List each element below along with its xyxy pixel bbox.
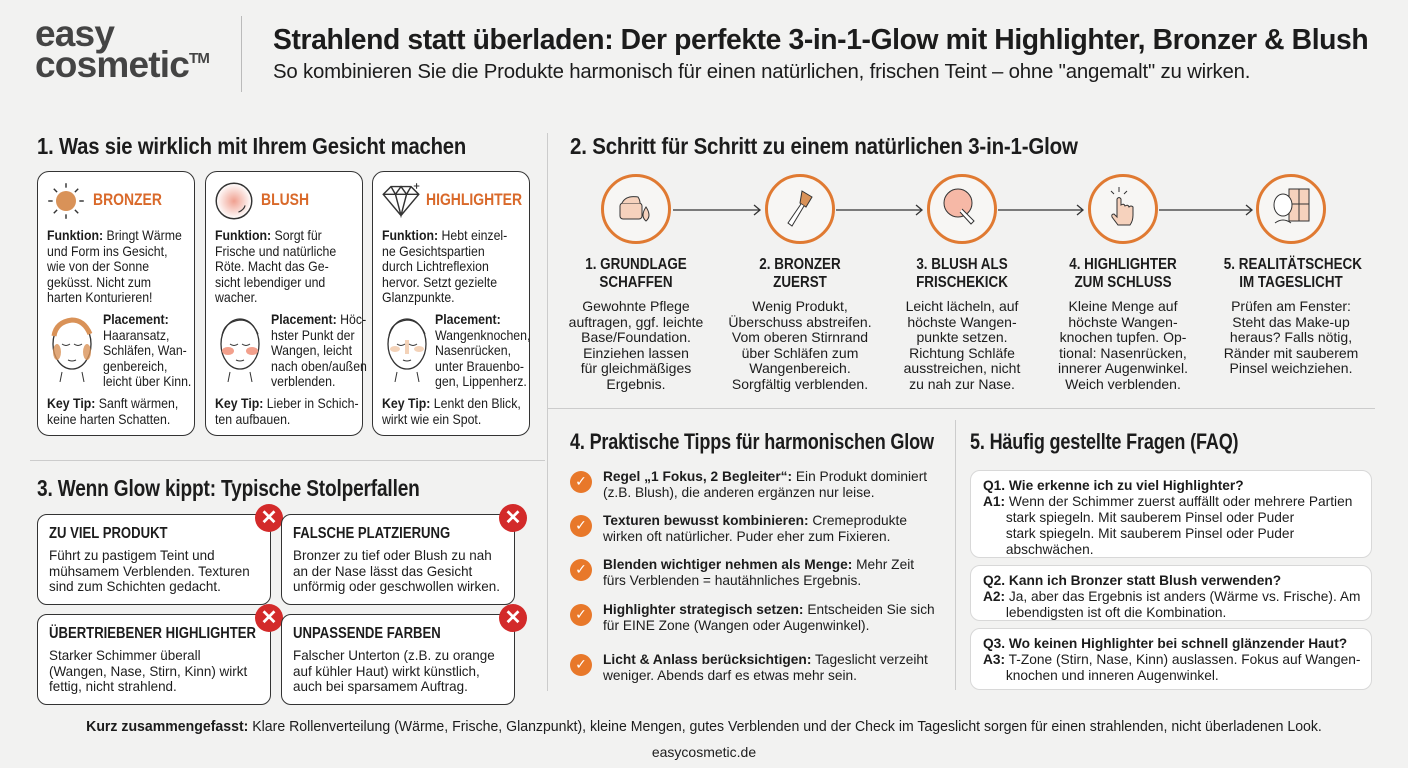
error card: zu viel produkt: Führt zu pastigem Teint und bbox=[49, 547, 215, 563]
step 5: Prüfen am Fenster: bbox=[1231, 298, 1351, 314]
tip 3: ✓ bbox=[575, 562, 587, 578]
icon: blush compact bbox=[216, 182, 252, 220]
tip 4 bbox=[570, 601, 935, 633]
card: bronzer: Funktion: Bringt Wärme bbox=[47, 227, 182, 243]
step 3: höchste Wangen- bbox=[907, 314, 1017, 330]
step 3: ausstreichen, nicht bbox=[904, 360, 1020, 376]
error card: highlighter: fettig, nicht strahlend. bbox=[49, 678, 177, 694]
faq 2: A2: Ja, aber das Ergebnis ist anders (Wärme vs. Frische). Am bbox=[983, 588, 1360, 604]
step 4: knochen tupfen. Op- bbox=[1060, 329, 1186, 345]
faq 1: abschwächen. bbox=[1006, 541, 1094, 557]
card: blush: nach oben/außen bbox=[271, 358, 367, 374]
tip 1 bbox=[570, 468, 927, 500]
step 4: höchste Wangen- bbox=[1068, 314, 1178, 330]
step 4: ZUM SCHLUSS bbox=[1074, 274, 1172, 291]
step 1: auftragen, ggf. leichte bbox=[569, 314, 703, 330]
icon: sun bbox=[48, 183, 84, 219]
card: bronzer: BRONZER bbox=[93, 190, 162, 209]
card: highlighter: Wangenknochen, bbox=[435, 326, 530, 342]
card: blush: Wangen, leicht bbox=[271, 342, 352, 358]
error card: farben: UNPASSENDE FARBEN bbox=[293, 625, 441, 642]
tip 5: ✓ bbox=[575, 657, 587, 673]
error card: falsche platzierung: ✕ bbox=[505, 507, 521, 529]
logo: cosmeticTM bbox=[35, 44, 209, 85]
error card: falsche platzierung: FALSCHE PLATZIERUNG bbox=[293, 525, 450, 542]
card: highlighter bbox=[372, 171, 530, 436]
card: bronzer: Haaransatz, bbox=[103, 326, 169, 342]
tip 1: Regel „1 Fokus, 2 Begleiter“: Ein Produkt dominiert bbox=[603, 468, 927, 484]
icon: diamond bbox=[382, 183, 420, 218]
faq 3: A3: T-Zone (Stirn, Nase, Kinn) auslassen. Fokus auf Wangen- bbox=[983, 651, 1360, 667]
step 2: Überschuss abstreifen. bbox=[728, 314, 872, 330]
error card: falsche platzierung: Bronzer zu tief oder Blush zu nah bbox=[293, 547, 492, 563]
card: blush: BLUSH bbox=[261, 190, 309, 209]
card: blush: Funktion: Sorgt für bbox=[215, 227, 322, 243]
card: bronzer: wie von der Sonne bbox=[47, 258, 149, 274]
icon: face bronzer bbox=[52, 318, 92, 382]
error card: falsche platzierung: an der Nase lässt das Gesicht bbox=[293, 562, 472, 578]
error card: zu viel produkt bbox=[37, 514, 271, 605]
error card: zu viel produkt: mühsamem Verblenden. Texturen bbox=[49, 562, 250, 578]
tip 2: Texturen bewusst kombinieren: Cremeprodukte bbox=[603, 512, 907, 528]
tip 1: (z.B. Blush), die anderen ergänzen nur leise. bbox=[603, 484, 875, 500]
step 5: IM TAGESLICHT bbox=[1239, 274, 1343, 291]
card: blush: Key Tip: Lieber in Schich- bbox=[215, 395, 359, 411]
card: blush: wacher. bbox=[215, 289, 257, 305]
step 5: Steht das Make-up bbox=[1232, 314, 1350, 330]
step 5: Pinsel weichziehen. bbox=[1230, 360, 1352, 376]
error card: highlighter bbox=[37, 614, 271, 705]
card: bronzer: geküsst. Nicht zum bbox=[47, 274, 151, 290]
error card: farben: auf kühler Haut) wirkt künstlich, bbox=[293, 662, 480, 678]
step 2 bbox=[728, 174, 872, 392]
step 5: heraus? Falls nötig, bbox=[1230, 329, 1352, 345]
logo bbox=[35, 13, 209, 85]
heading: section 4: 4. Praktische Tipps für harmonischen Glow bbox=[570, 429, 934, 454]
step 3: FRISCHEKICK bbox=[916, 274, 1008, 291]
step 5: 5. REALITÄTSCHECK bbox=[1224, 256, 1362, 273]
step 2: ZUERST bbox=[773, 274, 827, 291]
tip 3 bbox=[570, 556, 914, 588]
step 2: über Schläfen zum bbox=[742, 344, 858, 360]
card: highlighter: Glanzpunkte. bbox=[382, 289, 455, 305]
step 3: zu nah zur Nase. bbox=[909, 376, 1015, 392]
step 3: Richtung Schläfe bbox=[909, 344, 1015, 360]
card: blush: Frische und natürliche bbox=[215, 242, 336, 258]
error card: zu viel produkt: ZU VIEL PRODUKT bbox=[49, 525, 168, 542]
error card: highlighter: ÜBERTRIEBENER HIGHLIGHTER bbox=[49, 625, 256, 642]
tip 3: Blenden wichtiger nehmen als Menge: Mehr Zeit bbox=[603, 556, 914, 572]
tip 3: fürs Verblenden = hautähnliches Ergebnis. bbox=[603, 572, 861, 588]
card: blush bbox=[205, 171, 363, 436]
card: highlighter: Placement: bbox=[435, 311, 501, 327]
card: bronzer: Key Tip: Sanft wärmen, bbox=[47, 395, 178, 411]
step 5: Ränder mit sauberem bbox=[1224, 344, 1358, 360]
step 1: Gewohnte Pflege bbox=[582, 298, 690, 314]
tip 2: wirken oft natürlicher. Puder eher zum Fixieren. bbox=[603, 528, 890, 544]
step 1: SCHAFFEN bbox=[599, 274, 673, 291]
card: highlighter: Key Tip: Lenkt den Blick, bbox=[382, 395, 521, 411]
card: highlighter: wirkt wie ein Spot. bbox=[382, 410, 481, 426]
faq 3 bbox=[970, 628, 1372, 690]
step 1 bbox=[569, 174, 703, 392]
card: blush: Röte. Macht das Ge- bbox=[215, 258, 329, 274]
card: highlighter: gen, Lippenherz. bbox=[435, 373, 527, 389]
card: blush: verblenden. bbox=[271, 373, 335, 389]
card: bronzer: keine harten Schatten. bbox=[47, 410, 170, 426]
heading: section 3: 3. Wenn Glow kippt: Typische Stolperfallen bbox=[37, 475, 420, 501]
card: highlighter: Nasenrücken, bbox=[435, 342, 511, 358]
arrows between steps bbox=[673, 204, 1253, 216]
tip 2 bbox=[570, 512, 907, 544]
error card: zu viel produkt: ✕ bbox=[261, 507, 277, 529]
faq 3: Q3. Wo keinen Highlighter bei schnell glänzender Haut? bbox=[983, 635, 1347, 651]
error card: falsche platzierung bbox=[281, 514, 515, 605]
step 3: Leicht lächeln, auf bbox=[906, 298, 1018, 314]
step 2: Wangenbereich. bbox=[749, 360, 851, 376]
heading: section 5: 5. Häufig gestellte Fragen (FAQ) bbox=[970, 429, 1238, 454]
error card: farben: auch bei sparsamem Auftrag. bbox=[293, 678, 468, 694]
card: bronzer: genbereich, bbox=[103, 358, 167, 374]
step 4: innerer Augenwinkel. bbox=[1058, 360, 1188, 376]
step 2: Vom oberen Stirnrand bbox=[732, 329, 868, 345]
url: easycosmetic.de bbox=[652, 744, 756, 760]
card: blush: Placement: Höc- bbox=[271, 311, 366, 327]
faq 1: stark spiegeln. Mit sauberem Pinsel oder Puder bbox=[1006, 509, 1294, 525]
tip 4: für EINE Zone (Wangen oder Augenwinkel). bbox=[603, 617, 869, 633]
tip 1: ✓ bbox=[575, 474, 587, 490]
error card: farben bbox=[281, 614, 515, 705]
step 2: Wenig Produkt, bbox=[752, 298, 848, 314]
title: Strahlend statt überladen: Der perfekte 3-in-1-Glow mit Highlighter, Bronzer & Blush bbox=[273, 23, 1368, 55]
heading: section 2: 2. Schritt für Schritt zu einem natürlichen 3-in-1-Glow bbox=[570, 133, 1078, 159]
error card: farben: ✕ bbox=[505, 607, 521, 629]
tip 5: weniger. Abends darf es etwas mehr sein. bbox=[603, 667, 857, 683]
card: bronzer: harten Konturieren! bbox=[47, 289, 152, 305]
faq 1: stark spiegeln. Mit sauberem Pinsel oder Puder bbox=[1006, 525, 1294, 541]
step 3: punkte setzen. bbox=[916, 329, 1008, 345]
step 1: für gleichmäßiges bbox=[581, 360, 691, 376]
card: highlighter: ne Gesichtspartien bbox=[382, 242, 485, 258]
tip 4: Highlighter strategisch setzen: Entscheiden Sie sich bbox=[603, 601, 935, 617]
card: highlighter: hervor. Setzt gezielte bbox=[382, 274, 497, 290]
error card: falsche platzierung: unförmig oder geschwollen wirken. bbox=[293, 578, 500, 594]
faq 1: A1: Wenn der Schimmer zuerst auffällt oder mehrere Partien bbox=[983, 493, 1352, 509]
step 2: Sorgfältig verblenden. bbox=[732, 376, 868, 392]
card: highlighter: unter Brauenbo- bbox=[435, 358, 524, 374]
faq 2: lebendigsten ist oft die Kombination. bbox=[1006, 604, 1226, 620]
step 4: 4. HIGHLIGHTER bbox=[1069, 256, 1177, 273]
step 3: 3. BLUSH ALS bbox=[916, 256, 1008, 273]
tip 5 bbox=[570, 651, 928, 683]
error card: highlighter: ✕ bbox=[261, 607, 277, 629]
tip 5: Licht & Anlass berücksichtigen: Tageslicht verzeiht bbox=[603, 651, 928, 667]
card: bronzer: und Form ins Gesicht, bbox=[47, 242, 168, 258]
faq 3: knochen und inneren Augenwinkel. bbox=[1006, 667, 1219, 683]
step 4: Weich verblenden. bbox=[1065, 376, 1181, 392]
step 1: Einziehen lassen bbox=[583, 344, 689, 360]
card: blush: ten aufbauen. bbox=[215, 410, 290, 426]
step 5 bbox=[1224, 174, 1362, 376]
faq 1: Q1. Wie erkenne ich zu viel Highlighter? bbox=[983, 477, 1244, 493]
summary footer: Kurz zusammengefasst: Klare Rollenverteilung (Wärme, Frische, Glanzpunkt), kleine Mengen, gutes Verblenden und der Check im Tageslicht sorgen für einen strahlenden, nicht überladenen Look. bbox=[86, 718, 1322, 735]
heading: section 1: 1. Was sie wirklich mit Ihrem Gesicht machen bbox=[37, 133, 466, 159]
faq 1 bbox=[970, 470, 1372, 558]
faq 2: Q2. Kann ich Bronzer statt Blush verwenden? bbox=[983, 572, 1281, 588]
card: blush: sicht lebendiger und bbox=[215, 274, 325, 290]
card: highlighter: Funktion: Hebt einzel- bbox=[382, 227, 507, 243]
subtitle: So kombinieren Sie die Produkte harmonisch für einen natürlichen, frischen Teint – ohne "angemalt" zu wirken. bbox=[273, 61, 1250, 83]
tip 4: ✓ bbox=[575, 607, 587, 623]
card: blush: hster Punkt der bbox=[271, 326, 355, 342]
step 1: Ergebnis. bbox=[606, 376, 666, 392]
step 4 bbox=[1058, 174, 1188, 392]
error card: zu viel produkt: sind zum Schichten gedacht. bbox=[49, 578, 221, 594]
card: bronzer bbox=[37, 171, 195, 436]
card: bronzer: Schläfen, Wan- bbox=[103, 342, 187, 358]
card: highlighter: HIGHLIGHTER bbox=[426, 190, 522, 209]
faq 2 bbox=[970, 565, 1372, 621]
step 1: Base/Foundation. bbox=[581, 329, 691, 345]
card: bronzer: Placement: bbox=[103, 311, 169, 327]
logo: easy bbox=[35, 13, 114, 54]
tip 2: ✓ bbox=[575, 518, 587, 534]
error card: farben: Falscher Unterton (z.B. zu orange bbox=[293, 647, 495, 663]
error card: highlighter: Starker Schimmer überall bbox=[49, 647, 201, 663]
error card: highlighter: (Wangen, Nase, Stirn, Kinn) wirkt bbox=[49, 662, 247, 678]
step 2: 2. BRONZER bbox=[759, 256, 841, 273]
step 3 bbox=[904, 174, 1020, 392]
card: bronzer: leicht über Kinn. bbox=[103, 373, 191, 389]
icon: face highlighter bbox=[387, 318, 427, 382]
icon: face blush bbox=[220, 318, 260, 382]
step 1: 1. GRUNDLAGE bbox=[585, 256, 687, 273]
step 4: tional: Nasenrücken, bbox=[1059, 344, 1187, 360]
step 4: Kleine Menge auf bbox=[1069, 298, 1177, 314]
card: highlighter: durch Lichtreflexion bbox=[382, 258, 489, 274]
